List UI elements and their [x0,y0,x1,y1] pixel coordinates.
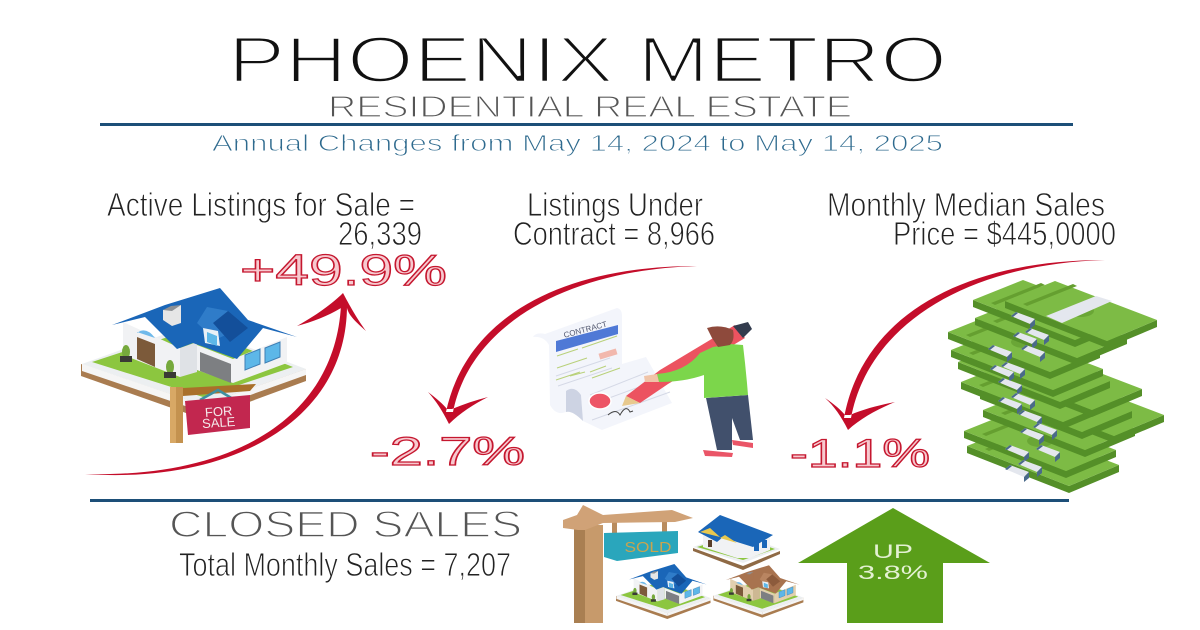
arrow: up to +49.9% [85,293,366,475]
subtitle: RESIDENTIAL REAL ESTATE [328,89,852,124]
icon: sold sign post: SOLD [624,539,672,556]
icon: contract document: CONTRACT [563,320,608,340]
icon: brown roof house [713,565,803,618]
label: up: UP [873,542,913,563]
heading: active listings: Active Listings for Sale = [107,186,415,223]
heading: active listings [107,186,422,252]
icon: blue roof house with yellow gables [693,515,780,570]
date range subheading: Annual Changes from May 14, 2024 to May 14, 2025 [212,130,943,156]
heading: active listings: 26,339 [338,215,422,252]
icon: blue roof house bottom [616,564,711,619]
heading: median sales price [827,186,1116,252]
heading: median sales price: Monthly Median Sales [827,186,1105,223]
icon: person in green shirt [644,326,753,457]
icon: house for sale [81,288,306,443]
stat: active listings change: +49.9% [240,246,447,295]
arrow: down to -2.7% [428,266,697,424]
heading: listings under contract: Listings Under [527,186,703,223]
stat: median price change: -1.1% [790,432,930,476]
icon: green up arrow [798,508,990,623]
text: total monthly sales: Total Monthly Sales = 7,207 [179,546,511,583]
icon: giant red pencil [622,322,752,406]
title: PHOENIX METRO [228,23,947,96]
heading: listings under contract [513,186,715,252]
stat: under contract change: -2.7% [370,430,525,474]
heading: closed sales: CLOSED SALES [169,504,522,545]
icon: contract document [533,308,672,430]
arrow: down to -1.1% [825,260,1105,430]
icon: sold sign post [563,505,693,623]
icon: for sale sign: FOR [204,403,233,420]
icon: for sale sign: SALE [202,414,236,431]
heading: median sales price: Price = $445,0000 [893,215,1116,252]
heading: listings under contract: Contract = 8,966 [513,215,715,252]
icon: contract being signed [533,308,753,457]
icon: stacks of money [948,280,1164,493]
icon: for sale sign [170,384,256,443]
label: 3.8%: 3.8% [858,563,928,584]
